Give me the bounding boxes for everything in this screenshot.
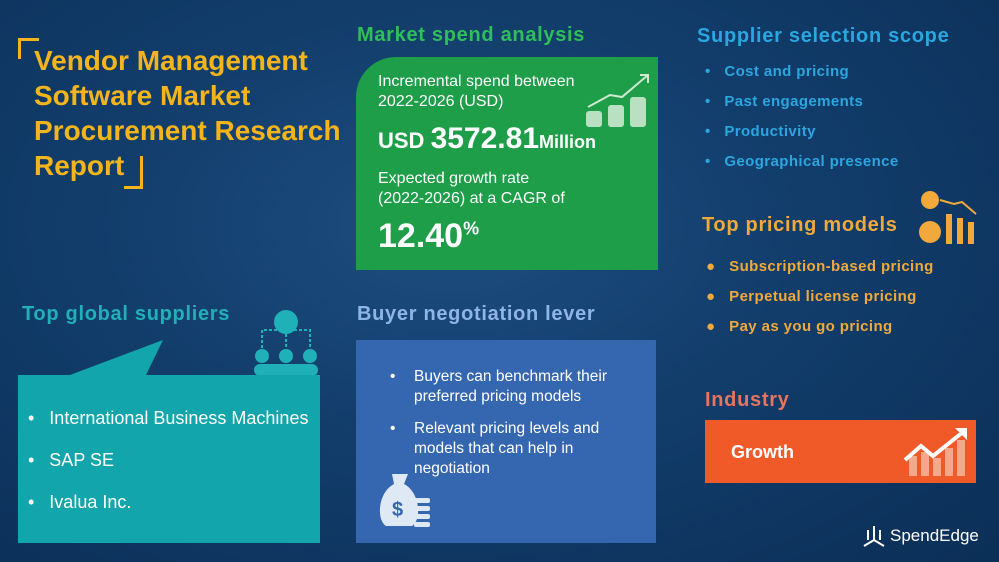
title xyxy=(18,38,341,189)
heading: market spend: Market spend analysis xyxy=(357,24,585,46)
title: Vendor Management xyxy=(34,45,308,76)
heading: industry: Industry xyxy=(705,389,790,411)
icon: pricing xyxy=(919,191,977,244)
list: pricing models: ● Pay as you go pricing xyxy=(706,318,893,335)
panel: top global suppliers: • SAP SE xyxy=(28,450,114,470)
panel: buyer negotiation: Buyers can benchmark their preferred pricing models xyxy=(414,368,607,405)
heading: supplier selection: Supplier selection scope xyxy=(697,25,949,47)
logo: SpendEdge xyxy=(864,526,979,547)
list: supplier selection xyxy=(705,63,899,170)
title: Report xyxy=(34,150,124,181)
panel: market spend: USD 3572.81Million xyxy=(378,122,596,155)
logo: SpendEdge: SpendEdge xyxy=(890,526,979,545)
icon: growth chart xyxy=(904,428,967,476)
icon: coins growth xyxy=(586,74,649,127)
panel: top global suppliers: • Ivalua Inc. xyxy=(28,492,131,512)
panel: market spend: 2022-2026 (USD) xyxy=(378,93,503,110)
panel: buyer negotiation: Relevant pricing levels and models that can help in negotiation xyxy=(414,420,599,477)
panel: market spend xyxy=(356,57,658,270)
title: Software Market xyxy=(34,80,250,111)
panel: buyer negotiation: • xyxy=(390,368,395,385)
panel: industry growth xyxy=(705,420,976,483)
panel: top global suppliers: • International Business Machines xyxy=(28,408,308,428)
panel: market spend: Incremental spend between xyxy=(378,73,575,90)
title: Procurement Research xyxy=(34,115,341,146)
list: pricing models xyxy=(706,258,934,335)
panel: industry growth: Growth xyxy=(731,442,794,462)
heading: buyer negotiation lever: Buyer negotiation lever xyxy=(357,303,595,325)
heading: pricing models: Top pricing models xyxy=(702,214,898,236)
list: supplier selection: • Geographical presence xyxy=(705,153,899,170)
panel: top global suppliers xyxy=(18,340,320,543)
icon: money bag: $ xyxy=(392,499,403,521)
list: pricing models: ● Subscription-based pricing xyxy=(706,258,934,275)
panel: buyer negotiation: • xyxy=(390,420,395,437)
panel: market spend: 12.40% xyxy=(378,217,479,255)
panel: market spend: (2022-2026) at a CAGR of xyxy=(378,190,565,207)
icon: global network xyxy=(254,310,318,375)
list: supplier selection: • Productivity xyxy=(705,123,816,140)
list: pricing models: ● Perpetual license pricing xyxy=(706,288,917,305)
heading: top global suppliers: Top global suppliers xyxy=(22,303,230,325)
icon: money bag xyxy=(380,474,430,527)
list: supplier selection: • Past engagements xyxy=(705,93,863,110)
panel: buyer negotiation xyxy=(356,340,656,543)
panel: market spend: Expected growth rate xyxy=(378,170,529,187)
list: supplier selection: • Cost and pricing xyxy=(705,63,849,80)
